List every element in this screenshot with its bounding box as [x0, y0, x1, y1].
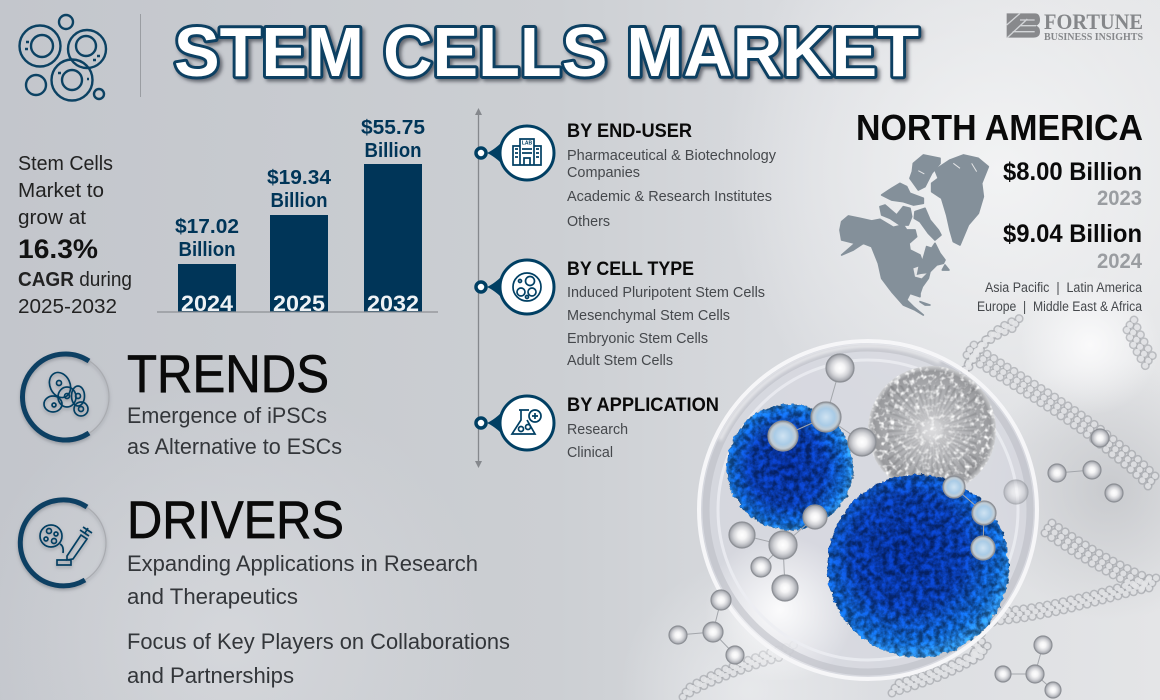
title: STEM CELLS MARKET	[174, 13, 919, 91]
icon: end-user pin	[476, 126, 554, 180]
end-user segment: Academic & Research Institutes	[567, 188, 772, 205]
drivers text: and Therapeutics	[127, 584, 298, 609]
other regions: Asia Pacific | Latin America	[985, 280, 1142, 295]
bar 2032: Billion	[364, 140, 422, 162]
market values: 2023	[1097, 187, 1142, 210]
CAGR text block: grow at	[18, 207, 86, 229]
other regions	[977, 280, 1142, 314]
bar 2032: 2032	[367, 291, 419, 316]
icon: header cells	[20, 15, 106, 100]
application segment: Clinical	[567, 444, 613, 461]
bar 2025: $19.34	[267, 167, 332, 189]
bar 2025	[267, 167, 332, 316]
bar 2024	[175, 216, 239, 316]
CAGR text block	[18, 153, 132, 318]
decorative bubble strands	[683, 317, 1156, 697]
bar 2025: Billion	[270, 190, 328, 212]
drivers text: Focus of Key Players on Collaborations	[127, 629, 510, 654]
CAGR text block: Market to	[18, 180, 104, 202]
end-user segment	[567, 121, 776, 230]
application segment	[567, 395, 719, 461]
market values	[1003, 158, 1142, 273]
trends text	[127, 345, 342, 459]
cell type segment: Adult Stem Cells	[567, 352, 673, 369]
application segment: BY APPLICATION	[567, 395, 719, 416]
market values: $8.00 Billion	[1003, 158, 1142, 186]
bar 2032	[361, 117, 425, 316]
CAGR text block: Stem Cells	[18, 153, 113, 175]
bar 2024: 2024	[181, 291, 234, 316]
other regions: Europe | Middle East & Africa	[977, 299, 1142, 314]
bar chart	[157, 117, 438, 316]
CAGR text block: CAGR during	[18, 269, 132, 291]
cell type segment	[567, 259, 765, 369]
icon: end-user pin: LAB	[522, 140, 533, 146]
icon: application pin	[476, 396, 554, 450]
icon: cell type pin	[476, 260, 554, 314]
drivers text: DRIVERS	[127, 491, 344, 550]
large blue cell	[827, 475, 1009, 657]
application segment: Research	[567, 421, 628, 438]
drivers text: Expanding Applications in Research	[127, 551, 478, 576]
trends text: Emergence of iPSCs	[127, 403, 327, 428]
end-user segment: BY END-USER	[567, 121, 692, 142]
cell type segment: Induced Pluripotent Stem Cells	[567, 284, 765, 301]
trends text: as Alternative to ESCs	[127, 434, 342, 459]
end-user segment: Others	[567, 213, 610, 230]
cell type segment: Embryonic Stem Cells	[567, 330, 708, 347]
arrow: segment timeline	[475, 108, 482, 468]
bar 2025: 2025	[273, 291, 325, 316]
cell type segment: BY CELL TYPE	[567, 259, 694, 280]
bar 2032: $55.75	[361, 117, 425, 139]
gray cell	[868, 366, 996, 494]
drivers text	[127, 491, 510, 688]
drivers text: and Partnerships	[127, 663, 294, 688]
icon: drivers ring	[20, 500, 106, 586]
cell type segment: Mesenchymal Stem Cells	[567, 307, 730, 324]
molecule connectors	[678, 368, 1092, 690]
small blue cell	[727, 404, 853, 530]
end-user segment: Companies	[567, 164, 640, 181]
bar 2024: $17.02	[175, 216, 239, 238]
logo: Fortune Business Insights: FORTUNE	[1044, 9, 1143, 34]
logo: Fortune Business Insights	[1007, 9, 1143, 43]
trends text: TRENDS	[127, 345, 329, 404]
end-user segment: Pharmaceutical & Biotechnology	[567, 147, 776, 164]
molecules	[669, 354, 1123, 698]
map: North America	[840, 155, 988, 315]
region heading: NORTH AMERICA	[856, 107, 1143, 148]
market values: $9.04 Billion	[1003, 220, 1142, 248]
market values: 2024	[1097, 250, 1142, 273]
CAGR text block: 2025-2032	[18, 296, 117, 318]
petri dish	[697, 339, 1039, 681]
bar 2024: Billion	[178, 239, 236, 261]
logo: Fortune Business Insights: BUSINESS INSIGHTS	[1044, 32, 1143, 43]
icon: trends ring	[22, 354, 109, 440]
illustration: stem cells in a dish	[669, 339, 1123, 698]
CAGR text block: 16.3%	[18, 234, 98, 264]
